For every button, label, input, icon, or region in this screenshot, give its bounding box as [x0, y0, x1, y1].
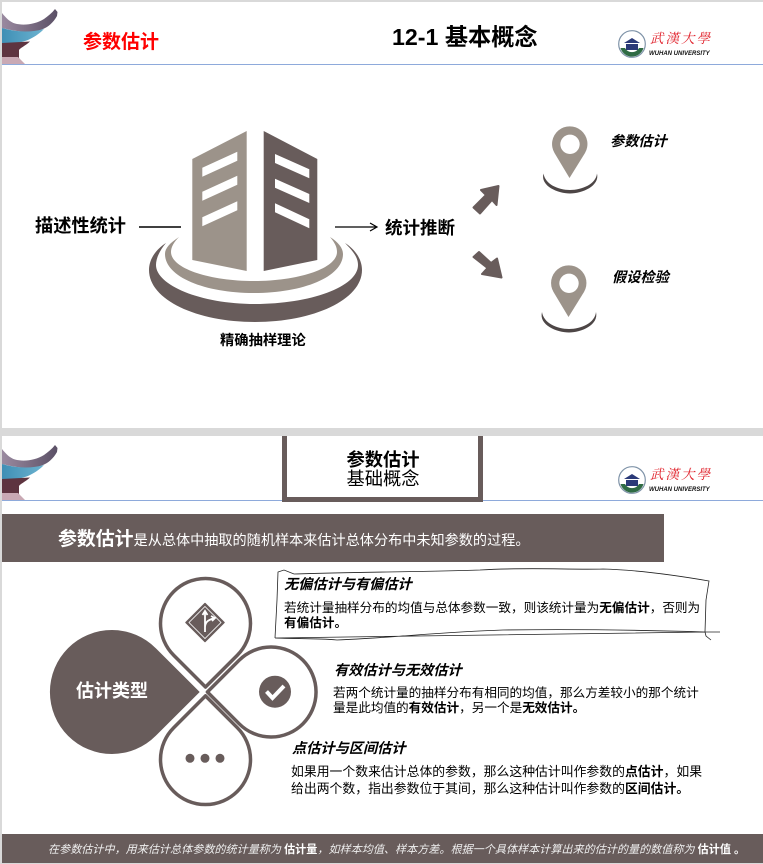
- logo: Wuhan University slide 1: 武漢大學: [650, 31, 712, 46]
- petal: estimator types: [50, 630, 200, 754]
- heading: slide title: 12-1 基本概念: [392, 24, 538, 50]
- slide 2 header rule: [2, 500, 763, 501]
- text block: point and interval: 点估计与区间估计: [292, 741, 406, 757]
- text block: point and interval: 如果用一个数来估计总体的参数，那么这种估计叫作参数的点估计，如果: [291, 764, 702, 778]
- slide 2: basic concepts: [2, 436, 763, 863]
- title box: parameter estimation basics: [284, 436, 480, 500]
- icon: pavilion roof slide 2: [2, 445, 58, 500]
- arrow: down right: [474, 252, 502, 278]
- text block: efficient and inefficient: 有效估计与无效估计: [334, 663, 462, 679]
- text block: unbiased and biased: 有偏估计。: [284, 616, 347, 630]
- label: sampling theory: 精确抽样理论: [220, 333, 306, 349]
- slide 1 header rule: [2, 64, 763, 65]
- icon: map pin hypothesis testing: [542, 265, 596, 332]
- icon: pavilion roof slide 1: [2, 9, 58, 64]
- text block: efficient and inefficient: 若两个统计量的抽样分布有相同的均值，那么方差较小的那个统计: [333, 686, 699, 700]
- logo: Wuhan University slide 1: [618, 30, 712, 58]
- definition band: [2, 514, 664, 562]
- text block: efficient and inefficient: [333, 662, 699, 714]
- icon: building on rings: [149, 131, 362, 322]
- footer band: [2, 834, 763, 863]
- text block: point and interval: [291, 741, 702, 796]
- line: descriptive statistics to building: [139, 226, 181, 228]
- label: hypothesis testing: 假设检验: [612, 270, 669, 286]
- label: statistical inference: 统计推断: [385, 218, 455, 238]
- logo: Wuhan University slide 2: [618, 466, 712, 494]
- title box text: 基础概念: [346, 468, 420, 489]
- title box text: 参数估计: [346, 449, 420, 470]
- label: descriptive statistics: 描述性统计: [35, 216, 126, 236]
- footer text: 在参数估计中，用来估计总体参数的统计量称为 估计量，如样本均值、样本方差。根据一个具体样本计算出来的估计的量的数值称为 估计值 。: [48, 844, 745, 856]
- text block: efficient and inefficient: 量是此均值的有效估计，另一个是无效估计。: [333, 700, 585, 714]
- logo: Wuhan University slide 2: 武漢大學: [650, 467, 712, 482]
- heading: section red: 参数估计: [83, 32, 159, 53]
- label: parameter estimation: 参数估计: [610, 134, 667, 150]
- petal: dots icon: [160, 696, 250, 805]
- petal: check icon: [207, 647, 316, 737]
- arrow: building to inference: [335, 223, 377, 231]
- logo: Wuhan University slide 1: WUHAN UNIVERSITY: [649, 50, 710, 56]
- icon: map pin parameter estimation: [543, 126, 597, 194]
- text block: point and interval: 给出两个数，指出参数位于其间，那么这种估计叫作参数的区间估计。: [291, 780, 689, 796]
- arrow: up right: [474, 186, 498, 214]
- text block: unbiased and biased: 无偏估计与有偏估计: [284, 577, 412, 593]
- definition text: 参数估计是从总体中抽取的随机样本来估计总体分布中未知参数的过程。: [58, 529, 530, 550]
- text block: unbiased and biased: 若统计量抽样分布的均值与总体参数一致，则该统计量为无偏估计，否则为: [284, 600, 700, 614]
- petal: road sign icon: [160, 578, 250, 687]
- logo: Wuhan University slide 2: WUHAN UNIVERSITY: [649, 486, 710, 492]
- hand-drawn callout outline: [275, 569, 720, 640]
- slide 1: overview: [2, 2, 763, 428]
- title box text: [346, 449, 420, 489]
- petal label: estimator types: 估计类型: [76, 681, 148, 701]
- text block: unbiased and biased: [284, 576, 700, 630]
